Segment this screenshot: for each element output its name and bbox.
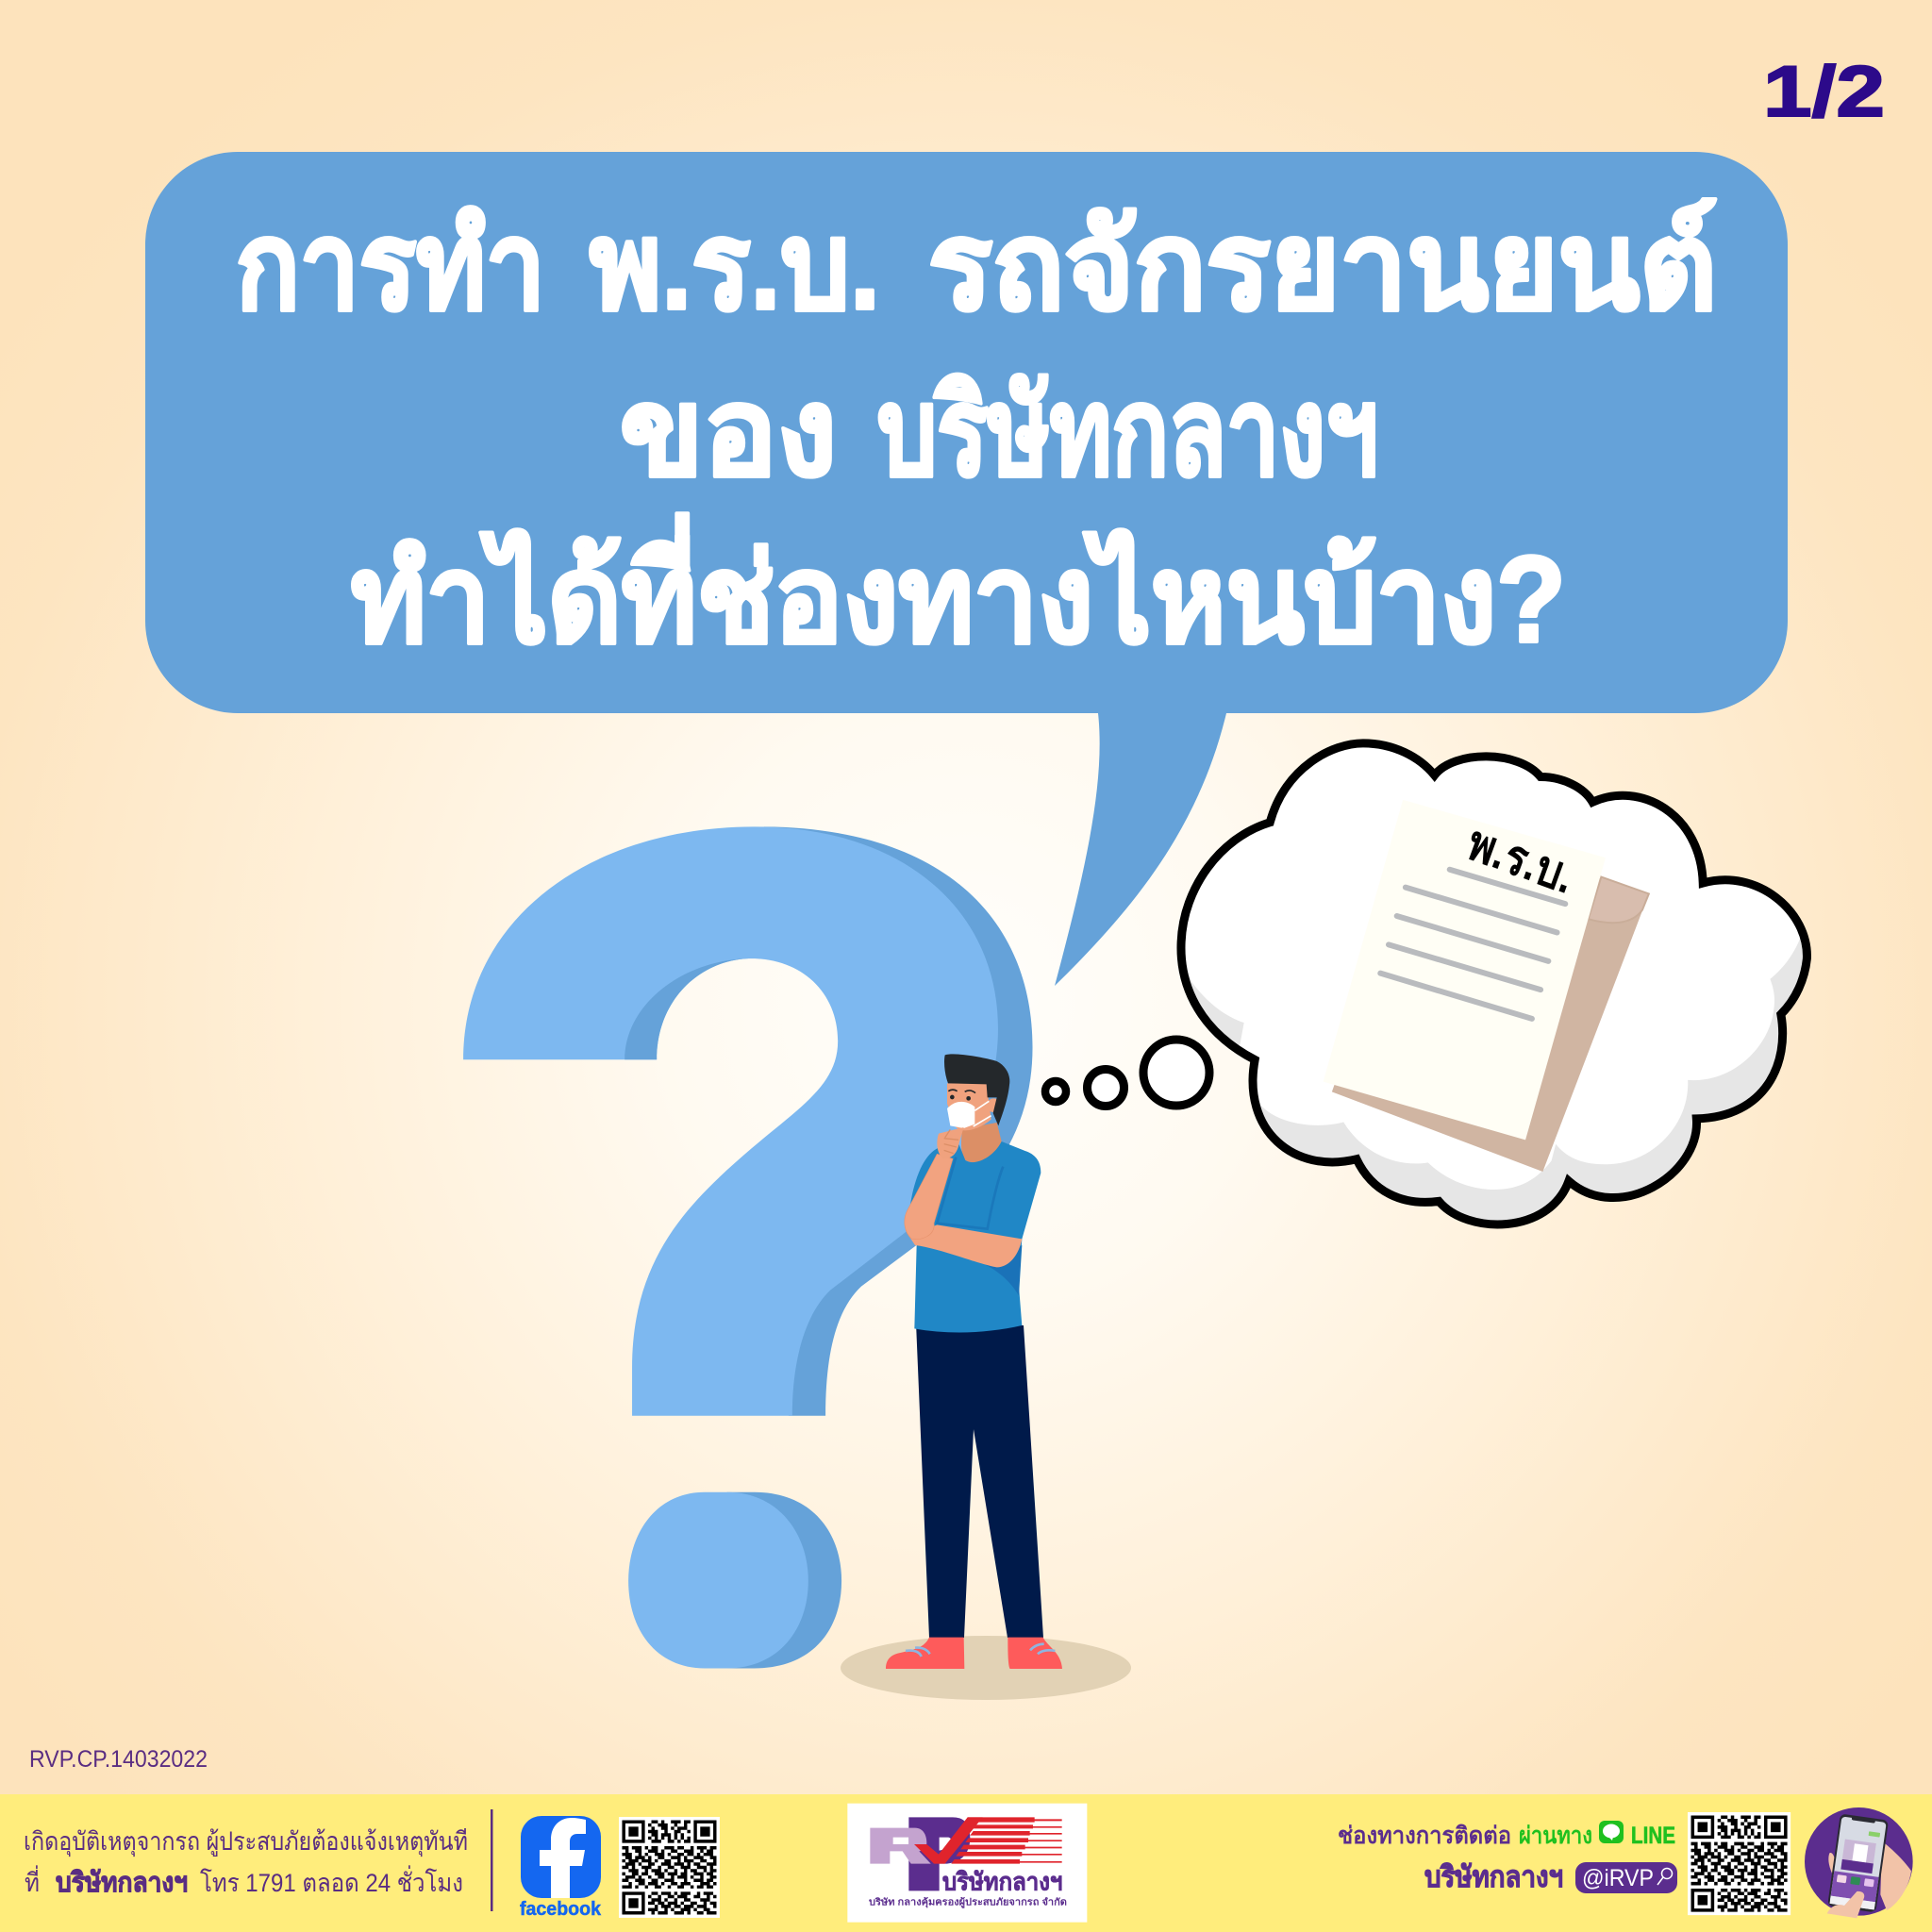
hand <box>937 1127 964 1158</box>
badge circle <box>1805 1807 1913 1916</box>
document heading: พ.ร.บ. <box>1460 816 1582 905</box>
cloud <box>1181 743 1807 1224</box>
thumb <box>1827 1891 1864 1918</box>
footer emergency text: เกิดอุบัติเหตุจากรถ ผู้ประสบภัยต้องแจ้งเหตุทันที <box>24 1827 468 1857</box>
t-shirt <box>910 1141 1041 1332</box>
QR code: facebook <box>619 1817 720 1918</box>
RVP logo <box>847 1804 1087 1923</box>
document paper <box>1324 800 1606 1140</box>
LINE ID pill <box>1575 1862 1677 1893</box>
footer emergency text: โทร 1791 ตลอด 24 ชั่วโมง <box>200 1865 463 1897</box>
title text: การทำ <box>236 197 545 335</box>
hair <box>944 1054 1009 1125</box>
LINE contact text: ช่องทางการติดต่อ <box>1338 1823 1511 1849</box>
face <box>947 1083 991 1130</box>
LINE contact text: บริษัทกลางฯ <box>1424 1860 1563 1893</box>
LINE contact text: ผ่านทาง <box>1519 1823 1592 1849</box>
neck <box>961 1123 1002 1162</box>
title text: บริษัทกลางฯ <box>877 363 1378 501</box>
cloud outline <box>1181 743 1807 1224</box>
RVP logo: บริษัท กลางคุ้มครองผู้ประสบภัยจากรถ จำกัด <box>869 1897 1067 1909</box>
face mask <box>947 1101 991 1128</box>
big question mark <box>463 826 1033 1668</box>
icon: facebook: facebook <box>520 1899 602 1920</box>
title text: ของ <box>620 363 837 501</box>
title text <box>236 197 1717 668</box>
title text: ทำได้ที่ช่องทางไหนบ้าง? <box>351 513 1566 668</box>
LINE ID pill: @iRVP <box>1582 1865 1654 1891</box>
speech bubble with title <box>145 152 1788 986</box>
ground shadow <box>841 1636 1131 1700</box>
envelope <box>1332 877 1649 1172</box>
phone hand <box>1880 1841 1911 1910</box>
QR code: LINE <box>1688 1812 1790 1915</box>
icon: LINE <box>1599 1821 1624 1843</box>
person <box>886 1054 1062 1669</box>
footer emergency text: บริษัทกลางฯ <box>56 1868 188 1898</box>
LINE contact text: LINE <box>1631 1823 1675 1849</box>
title text: พ.ร.บ. <box>590 197 880 335</box>
page number: 1/2 <box>1763 52 1885 132</box>
icon: facebook <box>520 1816 602 1920</box>
document lines <box>1380 870 1565 1019</box>
thought cloud with document <box>1181 743 1807 1224</box>
bubble shape <box>145 152 1788 986</box>
raised arm <box>905 1154 953 1240</box>
logo letter P <box>908 1817 970 1890</box>
phone <box>1827 1814 1889 1912</box>
footer band <box>0 1794 1932 1932</box>
logo wordmark: บริษัทกลางฯ <box>942 1868 1062 1896</box>
trousers <box>916 1323 1043 1638</box>
title text: รถจักรยานยนต์ <box>928 197 1717 335</box>
thought dots <box>1045 1040 1209 1106</box>
logo letter R <box>870 1828 931 1864</box>
eyes <box>948 1090 975 1101</box>
footer emergency text <box>24 1827 468 1898</box>
crossed arm <box>908 1224 1022 1267</box>
phone badge <box>1805 1807 1913 1918</box>
LINE contact text <box>1338 1821 1677 1893</box>
footer emergency text: ที่ <box>25 1865 40 1897</box>
shoes <box>886 1638 1062 1669</box>
divider <box>491 1809 492 1911</box>
reference code: RVP.CP.14032022 <box>29 1746 208 1773</box>
logo stripes <box>914 1817 1062 1864</box>
